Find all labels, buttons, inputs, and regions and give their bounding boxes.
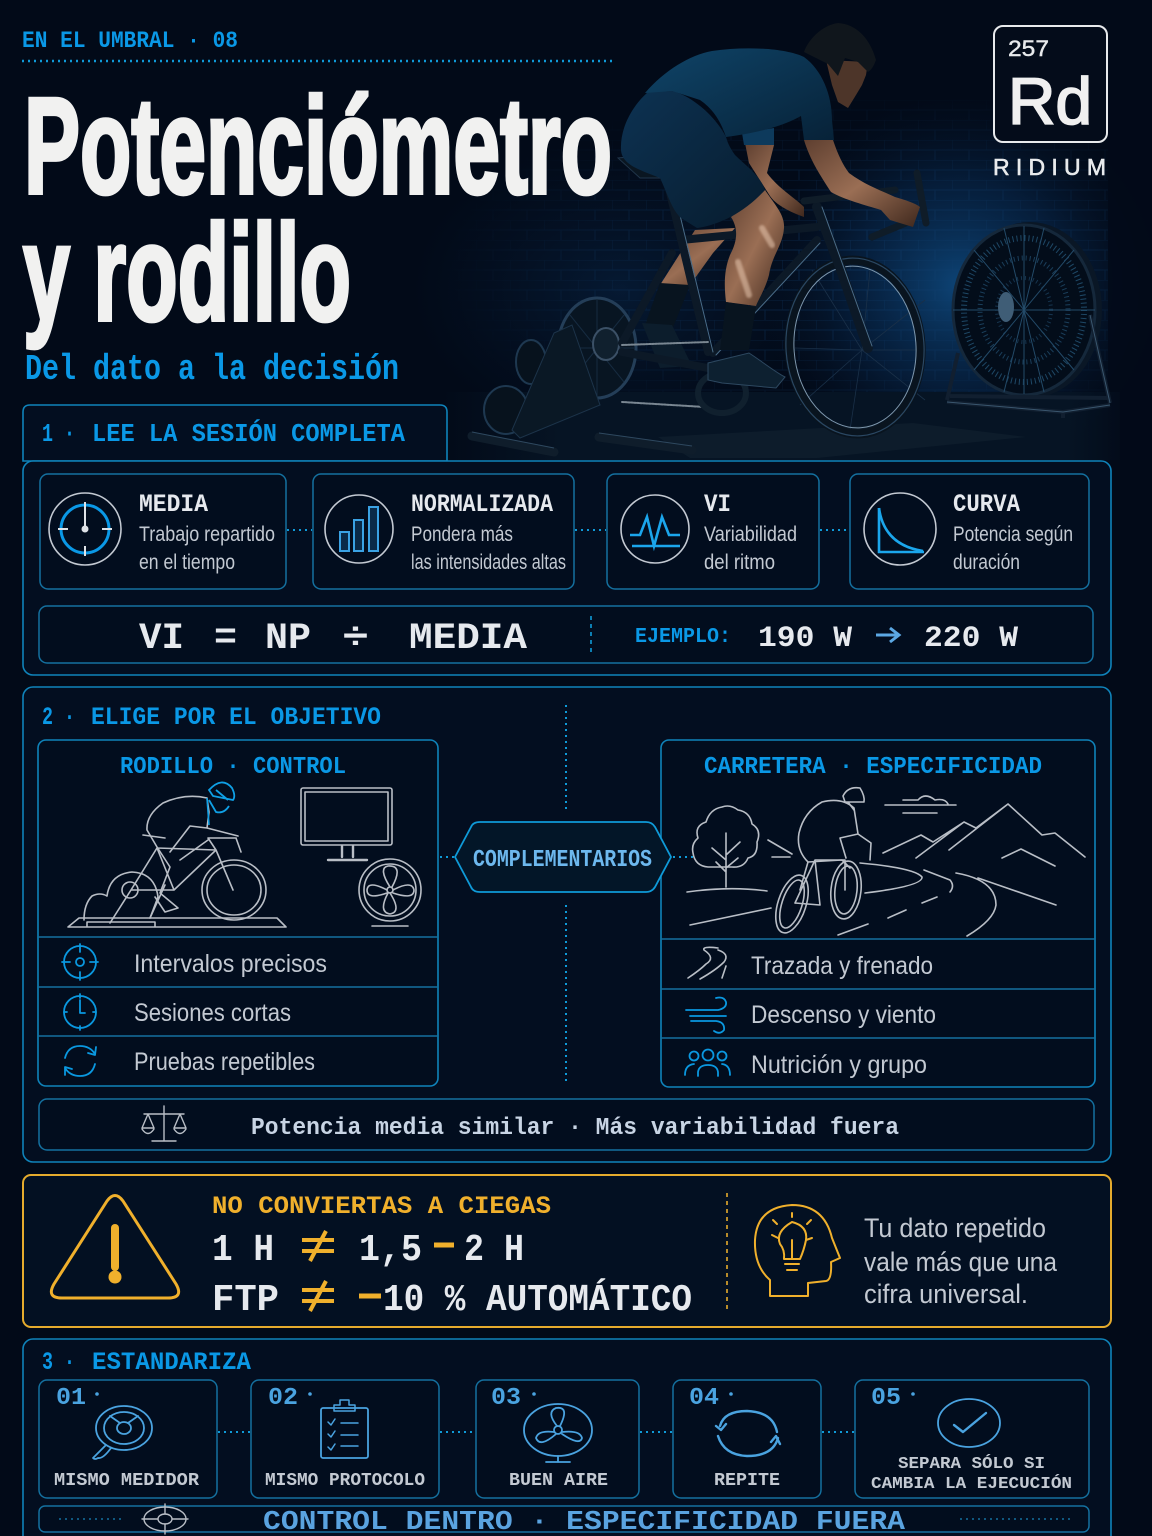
icon: power meter: [93, 1406, 152, 1459]
step 05: CAMBIA LA EJECUCIÓN: [871, 1474, 1072, 1494]
closing bar: [39, 1504, 1089, 1536]
step 04: 04: [689, 1385, 719, 1412]
step 01: 01: [56, 1385, 86, 1412]
subtitle: Del dato a la decisión: [25, 349, 399, 390]
header eyebrow: EN EL UMBRAL · 08: [22, 28, 238, 54]
row: sesiones cortas: Sesiones cortas: [134, 999, 291, 1027]
panel 2: elige por el objetivo: [23, 687, 1111, 1162]
connector dots: [287, 529, 849, 531]
step 01: MISMO MEDIDOR: [54, 1471, 199, 1491]
panel frame: [23, 461, 1111, 675]
row: nutrición y grupo: Nutrición y grupo: [751, 1051, 927, 1079]
icon: power curve: [864, 493, 936, 565]
warning line 1: [212, 1229, 524, 1272]
warning panel: [23, 1175, 1111, 1327]
card: normalizada: [313, 474, 574, 589]
panel 1: lee la sesión completa: [23, 405, 1111, 675]
section heading: 2 ·: [42, 703, 75, 732]
card: media: en el tiempo: [139, 551, 235, 574]
icon: clipboard: [321, 1400, 368, 1458]
element badge: RIDIUM: [993, 154, 1106, 180]
step 01: [39, 1380, 217, 1498]
icon: repeat arrows: [716, 1411, 780, 1456]
complementarios badge: [455, 822, 671, 892]
step 04: REPITE: [714, 1471, 780, 1491]
icon: scales: [142, 1106, 186, 1141]
panel 3: estandariza: [23, 1339, 1111, 1536]
fan photo: [947, 225, 1110, 418]
head: [804, 23, 876, 108]
advice text: cifra universal.: [864, 1279, 1028, 1309]
far arm: [745, 143, 804, 217]
section tab: LEE LA SESIÓN COMPLETA: [92, 419, 405, 449]
formula bar: VI: [139, 618, 184, 660]
card: vi: VI: [704, 490, 731, 519]
row: trazada y frenado: Trazada y frenado: [751, 952, 933, 980]
icon: check: [938, 1399, 1000, 1447]
connector dots: [440, 856, 695, 858]
section tab: 1 ·: [42, 419, 75, 449]
card: curva: [850, 474, 1089, 589]
step 05: [855, 1380, 1089, 1498]
warning line 2: [212, 1277, 692, 1322]
amber divider: [726, 1193, 728, 1312]
card: normalizada: NORMALIZADA: [411, 490, 553, 519]
row: intervalos precisos: [62, 944, 327, 980]
rodillo column: [38, 740, 438, 1086]
card: vi: [607, 474, 819, 589]
warning line 1: 1 H: [212, 1229, 274, 1272]
formula bar: ÷: [342, 618, 369, 660]
section tab: [23, 405, 447, 461]
bike frame: [618, 157, 926, 413]
eyebrow dotted line: [22, 60, 612, 62]
warning line 2: 10 % AUTOMÁTICO: [383, 1277, 692, 1322]
card: curva: CURVA: [953, 490, 1020, 519]
formula bar: 190 W: [758, 622, 852, 656]
formula bar: MEDIA: [409, 618, 528, 660]
sleeve far side: [742, 128, 774, 145]
card: curva: duración: [953, 551, 1020, 574]
icon: warning triangle: [51, 1196, 179, 1298]
complementarios badge: COMPLEMENTARIOS: [473, 847, 652, 874]
row: pruebas repetibles: Pruebas repetibles: [134, 1048, 315, 1076]
warning heading: NO CONVIERTAS A CIEGAS: [212, 1192, 551, 1221]
jersey: [645, 48, 834, 140]
title: [23, 70, 612, 350]
illustration: road landscape: [687, 788, 1085, 937]
card: media: [40, 474, 286, 589]
icon: fan: [524, 1404, 592, 1462]
row: descenso y viento: [686, 998, 936, 1033]
card: media: Trabajo repartido: [139, 523, 275, 546]
brick wall glow: [466, 106, 1108, 392]
card: normalizada: las intensidades altas: [411, 551, 566, 574]
card: vi: del ritmo: [704, 551, 775, 574]
near arm: [804, 140, 920, 227]
row: sesiones cortas: [64, 994, 291, 1030]
card: media: MEDIA: [139, 490, 208, 519]
formula bar: [39, 606, 1093, 663]
connector dots: [218, 1431, 854, 1433]
shorts: [621, 91, 765, 228]
far leg: [642, 228, 735, 368]
step 02: 02: [268, 1385, 298, 1412]
title: y rodillo: [23, 197, 351, 350]
card: curva: Potencia según: [953, 523, 1073, 546]
warning line 1: 2 H: [464, 1229, 524, 1272]
icon: monitor: [301, 788, 392, 860]
icon: fan: [359, 859, 421, 926]
element badge: Rd: [1008, 64, 1092, 138]
formula bar: NP: [265, 618, 311, 660]
element badge: [993, 26, 1107, 180]
advice text: Tu dato repetido: [864, 1213, 1046, 1243]
step 03: BUEN AIRE: [509, 1471, 608, 1491]
row: descenso y viento: Descenso y viento: [751, 1001, 936, 1029]
step 05: 05: [871, 1385, 901, 1412]
section heading: 3 ·: [42, 1348, 75, 1377]
center dotted axis: [565, 705, 567, 1083]
arrow: [876, 628, 899, 642]
warning line 1: 1,5: [359, 1229, 422, 1272]
step 03: [476, 1380, 639, 1498]
hero photo: cyclist on trainer: [466, 23, 1112, 460]
section heading: ELIGE POR EL OBJETIVO: [91, 703, 381, 732]
formula bar: =: [214, 618, 237, 660]
step 05: SEPARA SÓLO SI: [898, 1454, 1045, 1474]
icon: gauge clock: [49, 493, 121, 565]
row: trazada y frenado: [688, 947, 933, 980]
step 02: MISMO PROTOCOLO: [265, 1471, 425, 1491]
formula bar: 220 W: [924, 622, 1018, 656]
warning line 2: FTP: [212, 1279, 279, 1322]
card: vi: Variabilidad: [704, 523, 797, 546]
icon: bars: [325, 495, 393, 563]
row: intervalos precisos: Intervalos precisos: [134, 950, 327, 978]
advice text: [864, 1213, 1058, 1309]
floor and mat: [440, 392, 1120, 460]
near leg: [708, 190, 785, 388]
card: normalizada: Pondera más: [411, 523, 513, 546]
icon: head with bulb: [755, 1205, 840, 1296]
section heading: ESTANDARIZA: [92, 1348, 251, 1377]
advice text: vale más que una: [864, 1247, 1058, 1277]
summary bar: Potencia media similar · Más variabilidad fuera: [251, 1115, 899, 1142]
rodillo column: RODILLO · CONTROL: [120, 754, 346, 781]
step 04: [673, 1380, 821, 1498]
step 03: 03: [491, 1385, 521, 1412]
carretera column: [661, 740, 1095, 1087]
step 02: [251, 1380, 439, 1498]
element badge: 257: [1008, 36, 1049, 61]
row: pruebas repetibles: [65, 1046, 315, 1076]
illustration: indoor trainer: [68, 782, 286, 927]
icon: pulse: [621, 495, 689, 563]
title: Potenciómetro: [24, 70, 612, 223]
formula bar: EJEMPLO:: [635, 626, 731, 649]
row: nutrición y grupo: [685, 1050, 927, 1079]
icon: target: [142, 1504, 188, 1534]
trainer: [472, 298, 692, 452]
front wheel: [780, 253, 930, 441]
summary bar: [39, 1099, 1094, 1150]
carretera column: CARRETERA · ESPECIFICIDAD: [704, 754, 1042, 781]
